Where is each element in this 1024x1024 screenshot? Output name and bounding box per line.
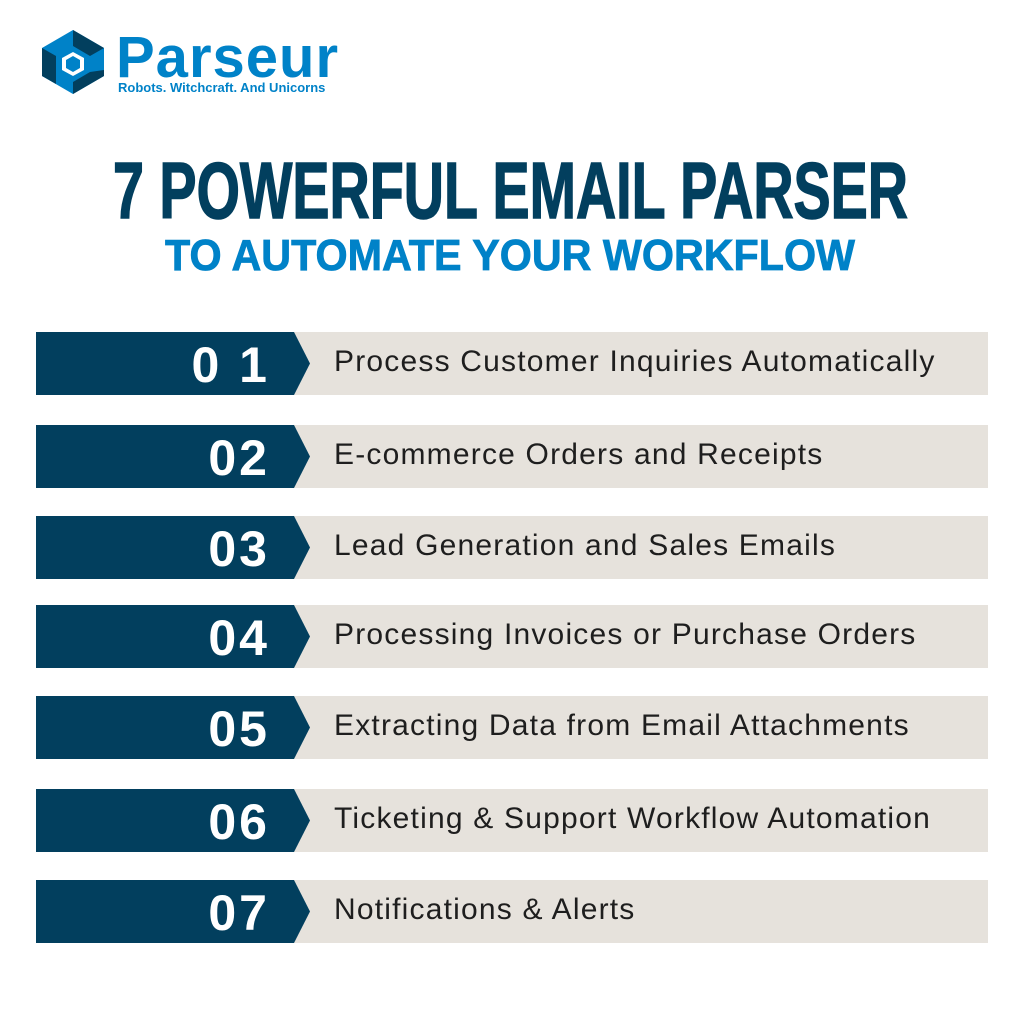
row 01: [36, 332, 988, 395]
title: [113, 150, 908, 280]
row 04: Processing Invoices or Purchase Orders: [334, 618, 916, 651]
row 01: 0 1: [191, 337, 270, 393]
row 05: 05: [208, 701, 270, 757]
row 02: [36, 425, 988, 488]
row 05: Extracting Data from Email Attachments: [334, 709, 910, 742]
row 02: 02: [208, 430, 270, 486]
row 03: Lead Generation and Sales Emails: [334, 529, 836, 562]
row 06: [36, 789, 988, 852]
row 06: 06: [208, 794, 270, 850]
row 07: Notifications & Alerts: [334, 893, 636, 926]
row 02: E-commerce Orders and Receipts: [334, 438, 824, 471]
row 03: 03: [208, 521, 270, 577]
row 01: Process Customer Inquiries Automatically: [334, 345, 936, 378]
icon: parseur cube: [42, 30, 104, 94]
row 03: [36, 516, 988, 579]
row 07: [36, 880, 988, 943]
brand name: Parseur: [116, 25, 339, 90]
row 05: [36, 696, 988, 759]
logo: [42, 25, 339, 95]
title: TO AUTOMATE YOUR WORKFLOW: [165, 231, 855, 280]
row 06: Ticketing & Support Workflow Automation: [334, 802, 931, 835]
row 04: [36, 605, 988, 668]
row 07: 07: [208, 885, 270, 941]
row 04: 04: [208, 610, 270, 666]
tagline: Robots. Witchcraft. And Unicorns: [118, 80, 325, 95]
